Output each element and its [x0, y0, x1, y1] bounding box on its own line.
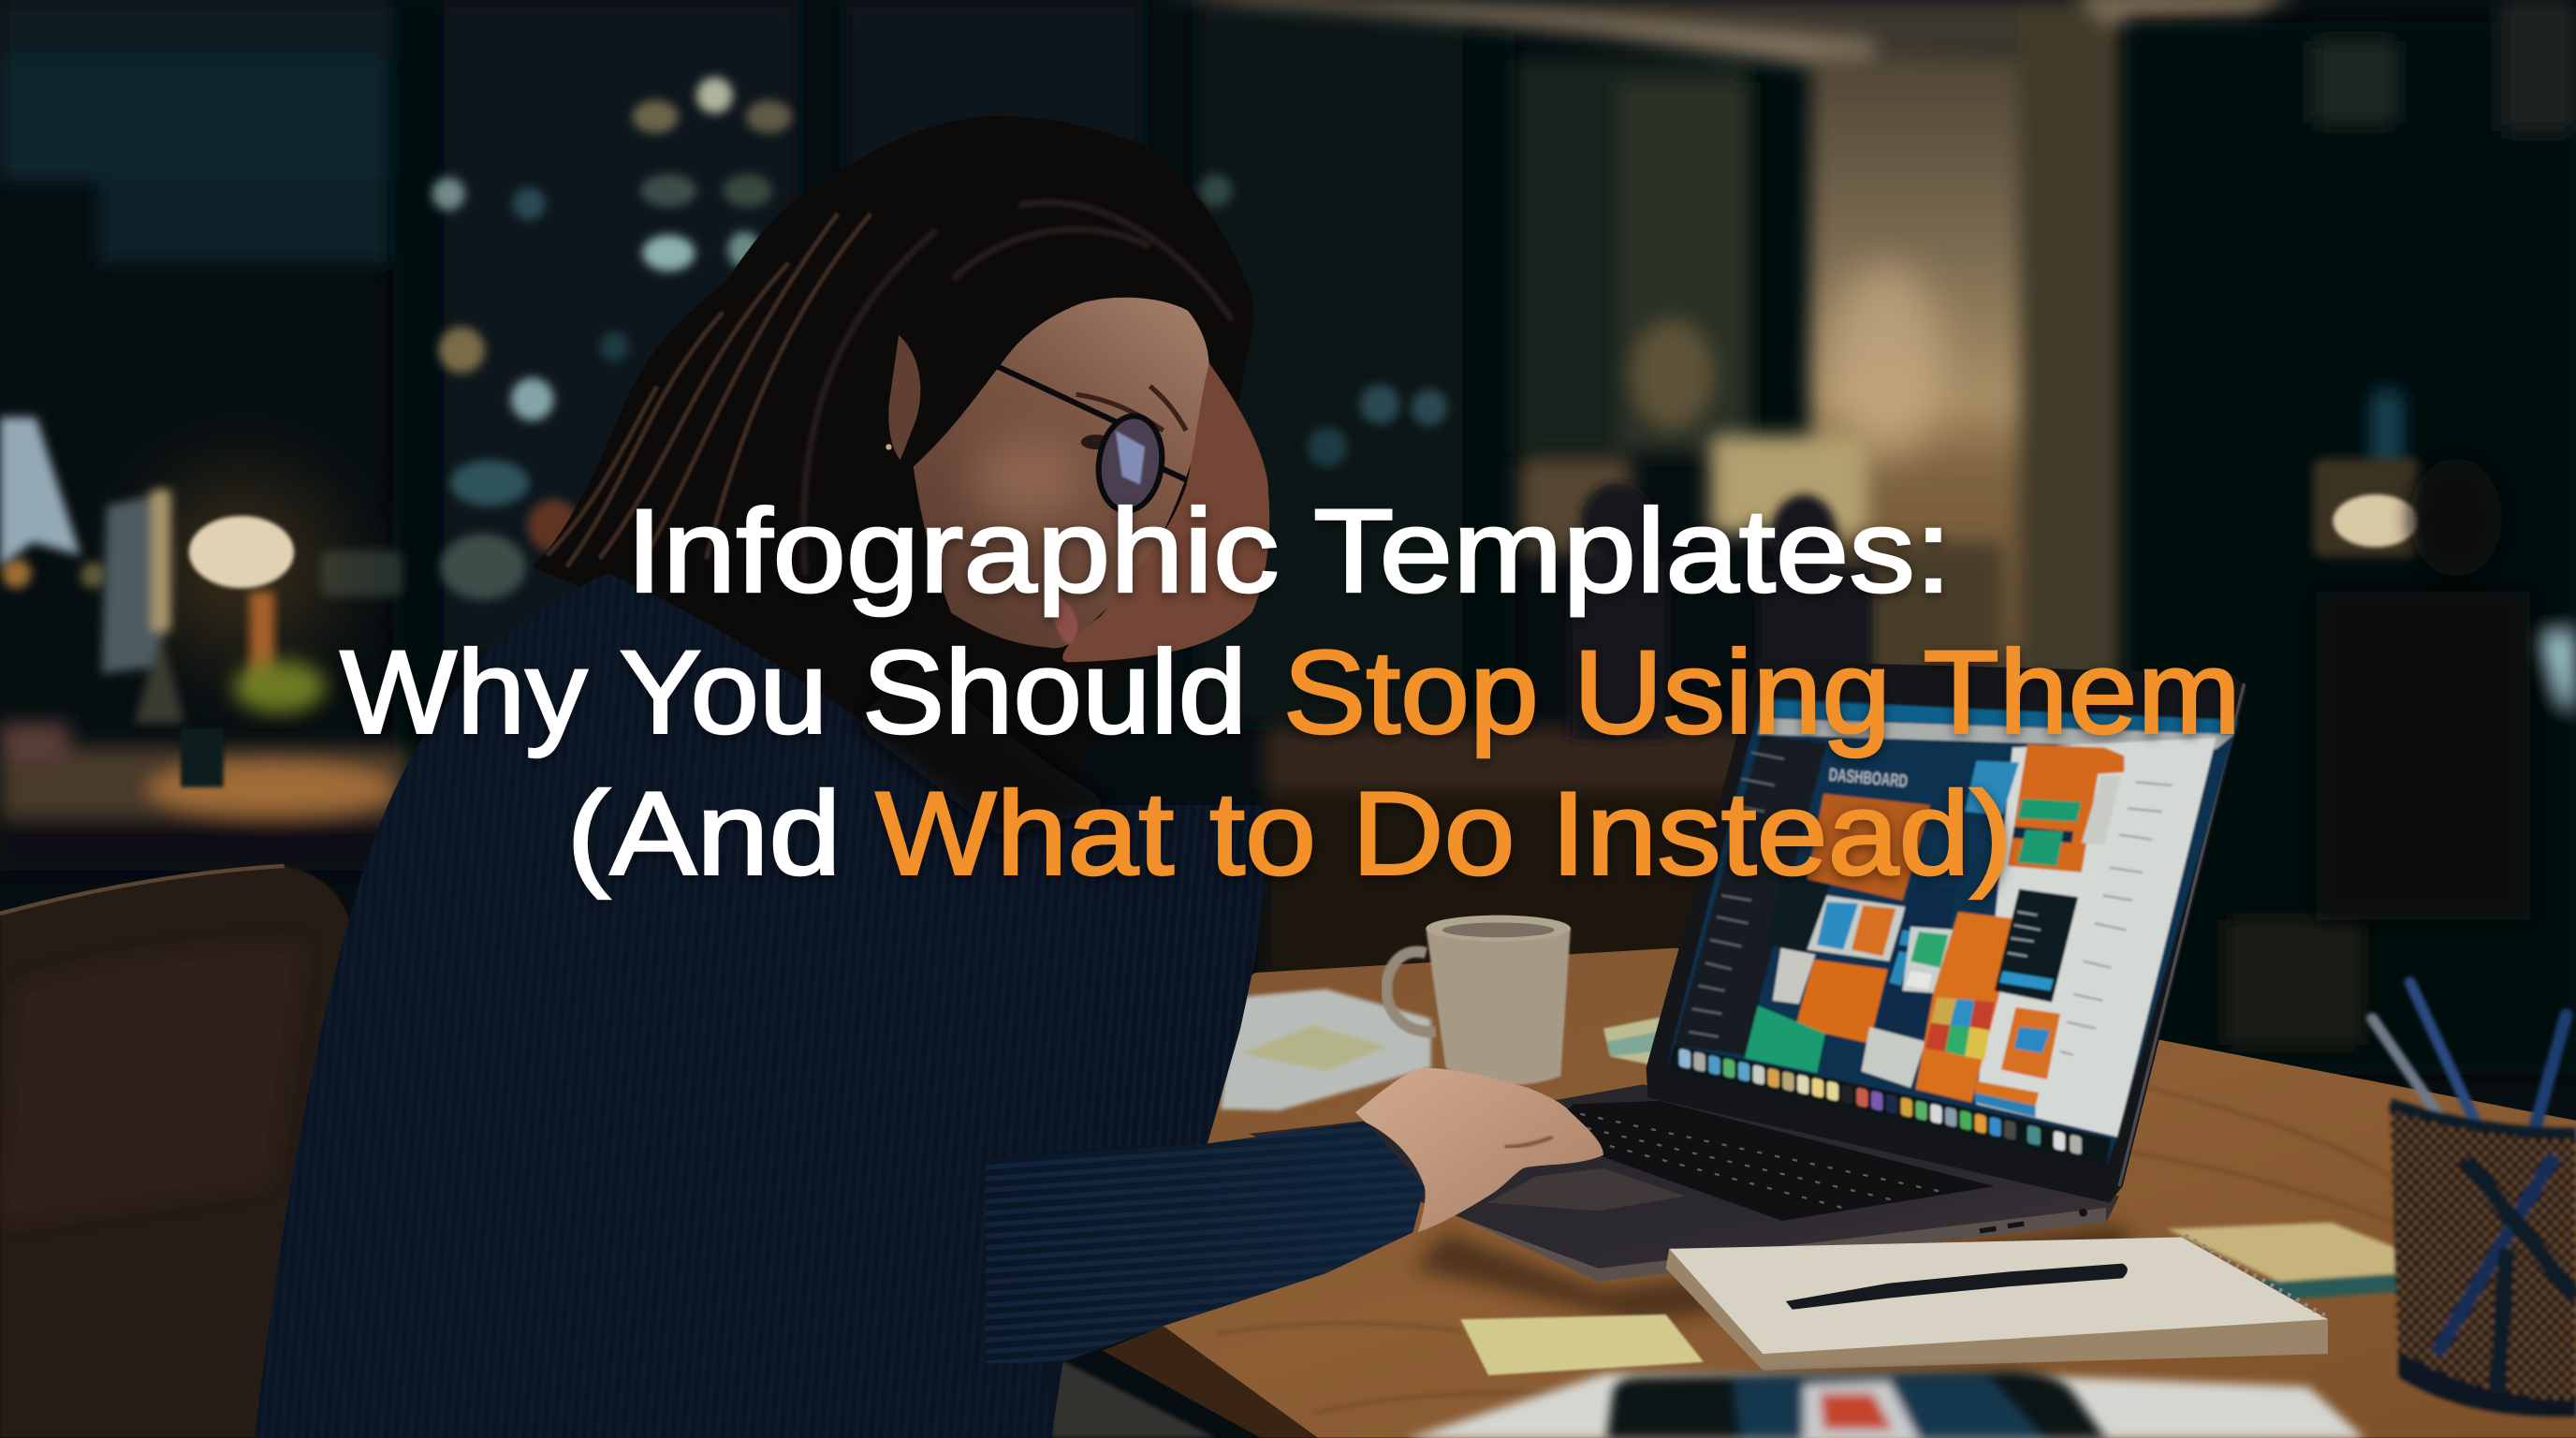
top blue tile	[1965, 761, 2019, 814]
base front edge	[1460, 1208, 2106, 1282]
cheek light	[974, 437, 1079, 522]
hair back	[533, 116, 1254, 822]
coffee mug	[1386, 916, 1571, 1085]
lid light rim	[2119, 683, 2244, 1186]
face	[914, 298, 1209, 648]
right sticky pad	[2167, 1223, 2402, 1301]
glasses	[997, 366, 1186, 515]
colour grid	[1925, 997, 1995, 1060]
keys	[1558, 1114, 1947, 1210]
pen	[1786, 1264, 2128, 1310]
navy workspace	[1666, 697, 2237, 1167]
wood grain	[1216, 1084, 2398, 1413]
sleeve	[986, 1123, 1425, 1364]
small blue tiles	[1889, 951, 1910, 986]
dark bar	[2012, 827, 2073, 843]
laptop	[1249, 661, 2247, 1282]
pens inside cup	[2437, 1155, 2554, 1354]
yellow sticky note	[1460, 1314, 1704, 1375]
pens	[2372, 983, 2566, 1134]
earring	[886, 444, 892, 450]
dock icons	[1679, 1049, 2082, 1155]
sleeve ribbing	[986, 1123, 1425, 1364]
title line 2: white part: Why You Should	[340, 626, 1247, 758]
green block one	[2017, 799, 2082, 822]
top centre orange card	[1808, 794, 1930, 901]
spiral binding	[2185, 1236, 2328, 1318]
sweater ribbing	[255, 574, 1265, 1438]
top right orange card	[2008, 744, 2124, 873]
green tile	[1910, 932, 1949, 968]
sidebar	[1674, 736, 1827, 1055]
hand on trackpad	[1355, 1068, 1603, 1232]
green block two	[2017, 829, 2063, 866]
notebook	[1666, 1236, 2328, 1371]
light block	[1862, 1027, 1925, 1088]
floor below table	[1051, 1356, 1216, 1438]
hair highlights	[547, 213, 871, 566]
dashboard heading: DASHBOARD	[1828, 766, 1909, 792]
sweater body	[255, 574, 1425, 1438]
mid background lamp and colleagues	[1265, 435, 2004, 977]
white tile	[1906, 971, 1932, 990]
night window	[0, 0, 1515, 920]
loose papers	[1405, 1373, 2365, 1438]
woman	[255, 116, 1603, 1438]
pen holder	[2372, 983, 2576, 1416]
sticky note stack	[1603, 1017, 1661, 1064]
right lamp and silhouette	[2313, 459, 2530, 920]
shadow on table	[1412, 1224, 2136, 1323]
dark menu	[1995, 888, 2078, 1003]
ear	[888, 335, 920, 460]
screen	[1666, 697, 2237, 1167]
header bars	[1761, 700, 2237, 734]
foreground desk items	[1405, 983, 2576, 1438]
green block lower left	[1745, 1005, 1825, 1073]
table front edge	[1103, 1326, 1318, 1438]
left desk with plant and cup	[0, 661, 407, 871]
laptop lid	[1647, 661, 2247, 1203]
right white panel	[1976, 738, 2217, 1137]
knuckle shading	[1505, 1137, 1553, 1147]
phone	[1606, 1371, 2106, 1438]
white card	[1773, 948, 1815, 1004]
eyebrow and frown	[1076, 386, 1186, 431]
lens reflection	[1116, 431, 1145, 485]
keyboard	[1538, 1101, 1995, 1221]
city bokeh lights	[2, 77, 1447, 600]
light panel behind green tile	[1902, 927, 1958, 994]
menu rows	[2008, 912, 2041, 956]
light panel behind tiles	[1808, 895, 1906, 961]
tall orange card	[1915, 912, 2012, 1103]
wall glow	[1830, 263, 1942, 460]
title line 2: orange part: Stop Using Them	[1283, 626, 2241, 758]
lips	[1051, 594, 1077, 644]
office chair	[0, 866, 355, 1438]
laptop base	[1249, 1084, 2119, 1278]
navy middle column	[1876, 884, 1956, 1038]
title line 3: white part: (And	[567, 768, 842, 900]
right window area	[2124, 0, 2576, 1075]
white block	[2082, 775, 2121, 844]
papers under mug	[1221, 990, 1431, 1110]
right panel rows	[2060, 782, 2172, 1055]
title line 1: Infographic Templates:	[626, 485, 1952, 617]
title line 3: orange part: What to Do Instead)	[875, 768, 2012, 900]
hand at temple	[1062, 363, 1269, 662]
mesh cup	[2391, 1104, 2576, 1413]
left monitors	[0, 418, 184, 723]
left desk lamp	[151, 477, 332, 690]
table top	[1018, 948, 2576, 1438]
title	[340, 485, 2241, 900]
neck shadow	[855, 657, 1117, 838]
blue tile	[1817, 902, 1858, 949]
menu button	[1999, 971, 2054, 990]
orange framed tile	[2001, 1007, 2060, 1079]
bottom orange and blue strip	[1975, 1081, 2039, 1106]
ports	[1980, 1209, 2087, 1233]
sidebar rows	[1689, 753, 1784, 1036]
left dark panel	[1766, 871, 1832, 953]
orange tile	[1852, 905, 1895, 956]
eye	[1081, 434, 1110, 449]
trackpad	[1486, 1168, 1686, 1211]
dock	[1666, 1045, 2111, 1167]
far window with wall reflection	[1515, 59, 1810, 453]
big orange square	[1795, 960, 1888, 1043]
wooden table	[1018, 948, 2576, 1438]
wall column and beam	[1150, 0, 2300, 690]
